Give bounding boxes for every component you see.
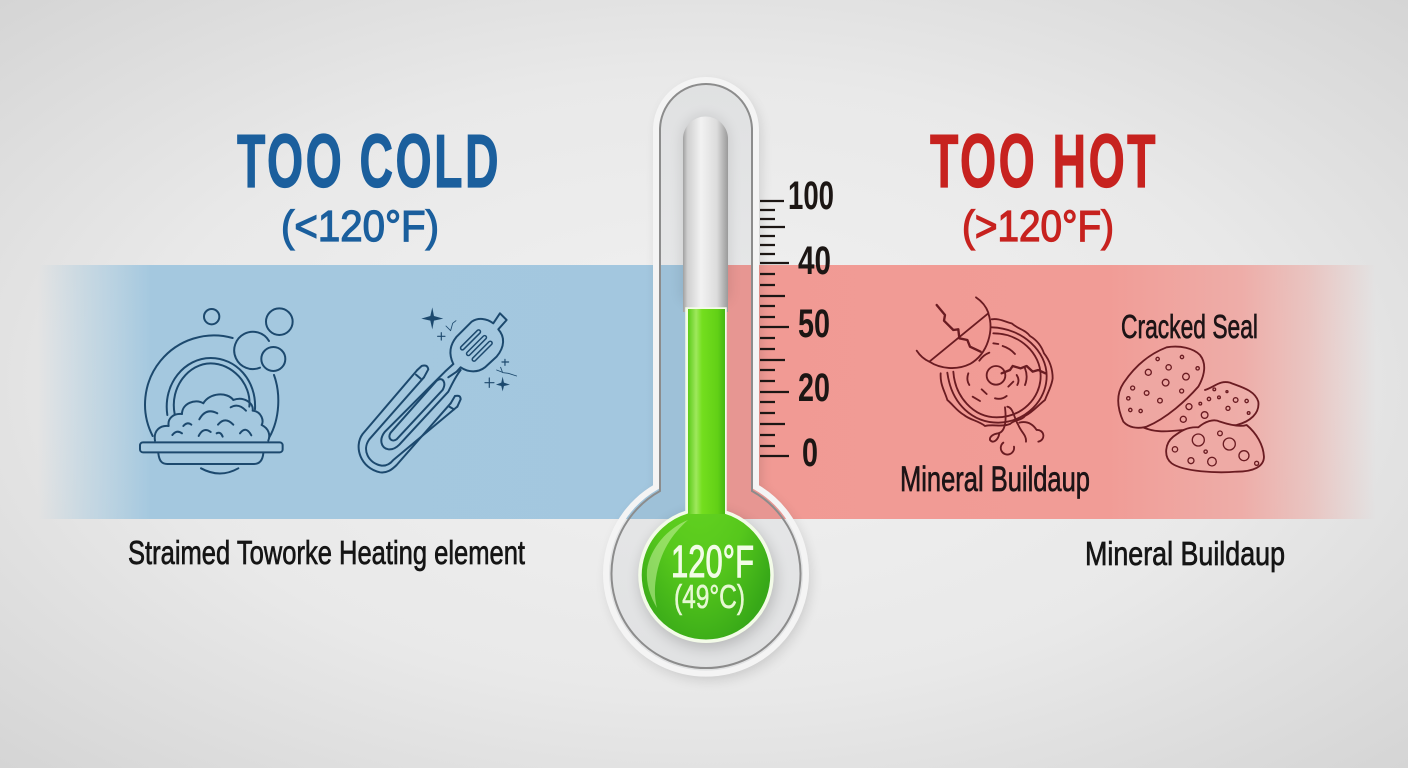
icon: mineral rocks — [1118, 347, 1264, 472]
scale labels — [788, 174, 834, 475]
label: cracked seal: Cracked Seal — [1121, 308, 1258, 345]
heading: too hot — [930, 119, 1158, 251]
caption: heating element: Straimed Toworke Heating element — [128, 534, 525, 571]
scale labels: 100 — [788, 174, 834, 218]
panel: too cold band — [38, 265, 706, 519]
caption: mineral buildup: Mineral Buildaup — [1085, 535, 1285, 572]
thermometer — [606, 80, 809, 679]
scale ticks — [760, 201, 789, 456]
heading: too cold: TOO COLD — [237, 119, 501, 203]
panel: too hot band — [706, 265, 1376, 519]
scale labels: 0 — [802, 431, 818, 475]
scale labels: 40 — [798, 239, 831, 283]
heading: too hot range: (>120°F) — [962, 202, 1114, 251]
glass tube — [683, 116, 728, 312]
bulb reading: 120°F — [671, 536, 754, 587]
scale labels: 20 — [798, 366, 830, 410]
glass body — [606, 80, 806, 674]
heading: too cold range: (<120°F) — [281, 202, 439, 251]
bulb reading in celsius: (49°C) — [674, 578, 745, 615]
icon: dish with soap foam and bubbles — [140, 308, 293, 473]
icon: cracked seal disc — [917, 297, 1053, 455]
label: mineral buildup inside band: Mineral Buildaup — [900, 460, 1090, 499]
heading: too hot: TOO HOT — [930, 119, 1158, 203]
scale labels: 50 — [798, 302, 830, 346]
temperature scale — [760, 174, 834, 475]
icon: heating element with sparkles — [359, 307, 517, 472]
heading: too cold — [237, 119, 501, 251]
green mercury column and bulb — [640, 309, 776, 648]
